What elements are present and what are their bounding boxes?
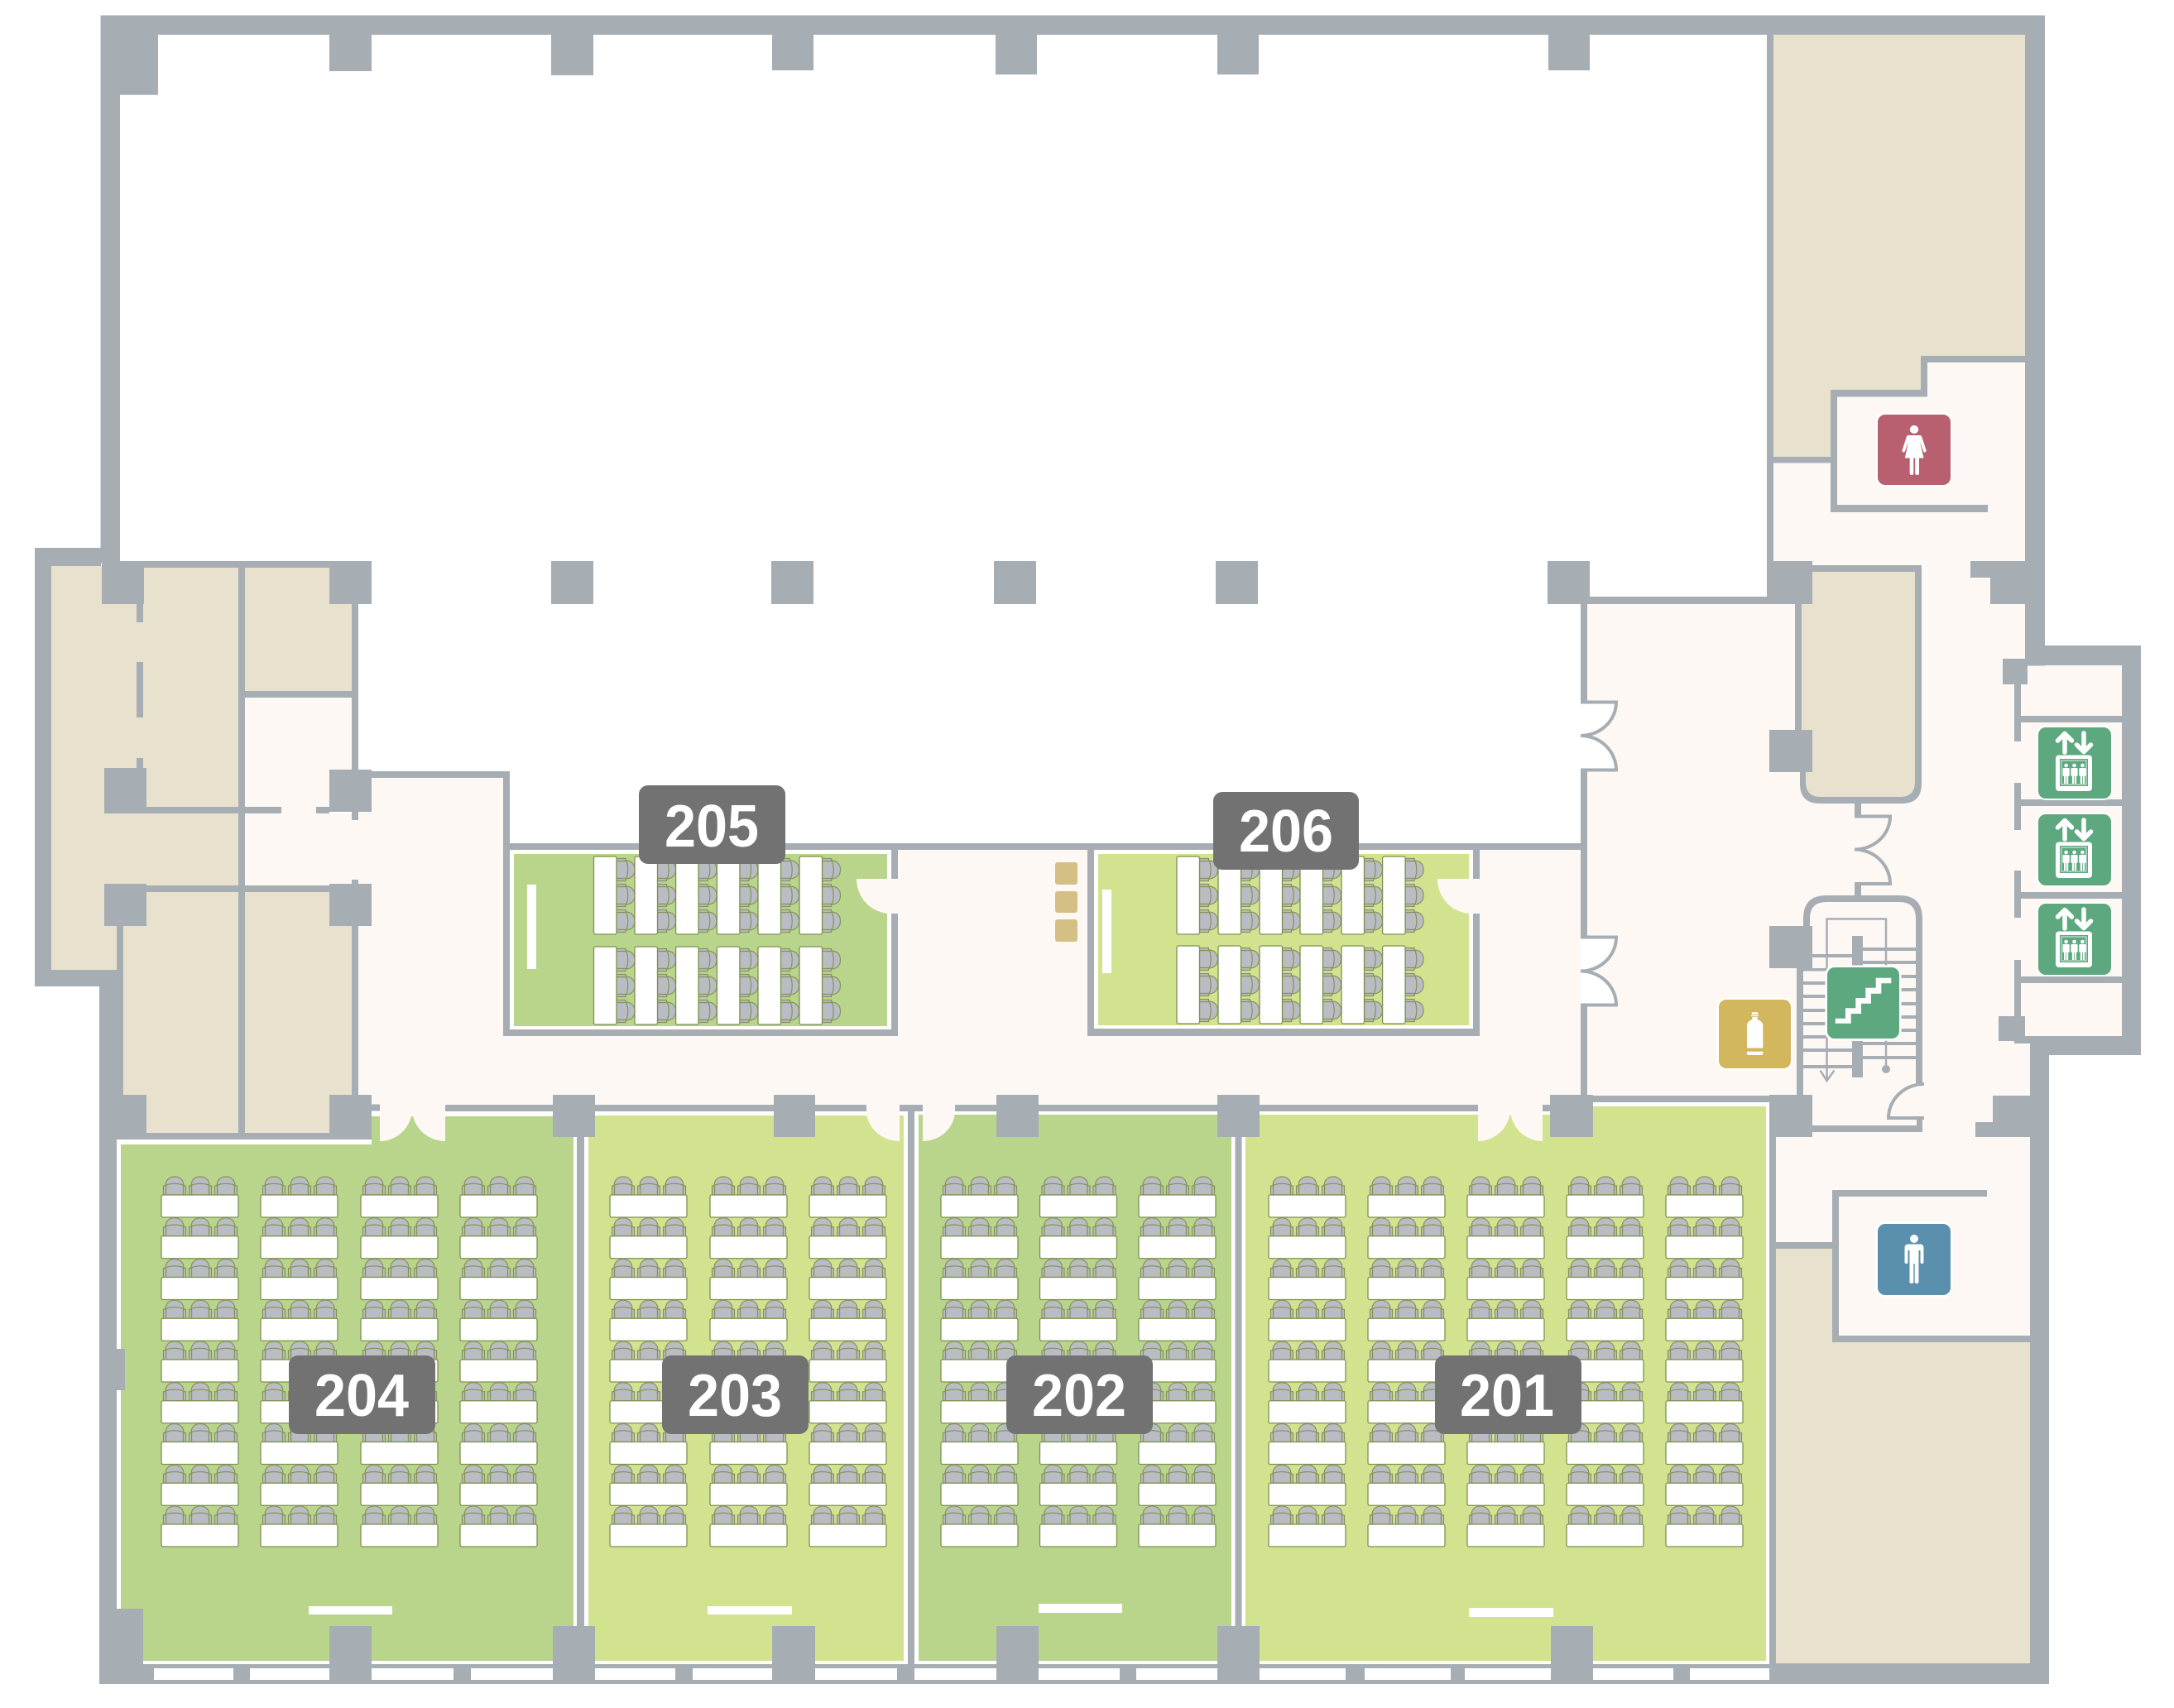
icon: drinking water bottle <box>1716 998 1792 1071</box>
desks <box>161 1177 537 1547</box>
men's room walls <box>1776 1242 1832 1249</box>
label: room 203 <box>662 1355 809 1434</box>
outer walls <box>101 15 2045 35</box>
women's room walls <box>1921 356 2025 362</box>
stair treads <box>1802 936 1916 1077</box>
icon: men's restroom <box>1875 1221 1953 1298</box>
room 203 floor <box>588 1115 904 1661</box>
label: room 204: 204 <box>314 1363 409 1429</box>
room 203 furniture <box>610 1177 886 1614</box>
room floor margin <box>117 1102 1769 1664</box>
stairwell walls <box>1803 895 1922 1084</box>
stair direction line <box>1821 919 1886 1081</box>
door: room 201 <box>1478 1104 1543 1141</box>
label: room 202 <box>1006 1355 1153 1434</box>
storage room with rounded corners <box>1767 561 1922 804</box>
label: room 205: 205 <box>665 794 759 860</box>
whiteboard <box>1039 1604 1122 1613</box>
icon: elevator 3 <box>2037 902 2113 976</box>
room 206 floor <box>1098 854 1469 1025</box>
stairwell door <box>1888 1084 1924 1118</box>
label: room 201: 201 <box>1460 1363 1554 1429</box>
door: east hall upper double door <box>1581 702 1616 770</box>
east hall walls <box>1590 597 1767 604</box>
label: room 204 <box>289 1355 435 1434</box>
door: room 206 <box>1437 879 1480 914</box>
partition walls around rooms 205 and 206 <box>372 771 510 778</box>
door: east hall lower double door <box>1581 937 1616 1005</box>
label: room 205 <box>639 785 785 864</box>
stairwell <box>1769 895 1924 1118</box>
label: room 206 <box>1213 792 1359 870</box>
desks <box>1177 856 1423 1024</box>
room 206 furniture <box>1102 856 1423 1024</box>
label: room 203: 203 <box>688 1363 782 1429</box>
whiteboard <box>1469 1608 1553 1617</box>
desks <box>941 1177 1216 1547</box>
room 201 furniture <box>1269 1177 1743 1617</box>
icon: stairs <box>1826 965 1902 1041</box>
label: room 202: 202 <box>1032 1363 1126 1429</box>
bottom pillars <box>329 1626 372 1684</box>
whiteboard <box>1102 890 1111 973</box>
desks <box>610 1177 886 1547</box>
room 205 floor <box>514 854 887 1026</box>
room 202 furniture <box>941 1177 1216 1613</box>
room 204 furniture <box>161 1177 537 1614</box>
room 204 floor <box>121 1116 573 1661</box>
room 202 floor <box>919 1115 1231 1661</box>
door: room 202 <box>923 1104 955 1141</box>
icon: elevator 1 <box>2037 726 2113 800</box>
desks <box>594 856 841 1024</box>
elevator bay walls <box>2003 659 2028 684</box>
tan lockers <box>1055 862 1077 942</box>
middle pillars <box>102 561 144 604</box>
door: room 205 <box>857 879 898 914</box>
icon: elevator 2 <box>2037 813 2113 887</box>
door: room 203 <box>866 1104 900 1141</box>
whiteboard <box>309 1606 392 1614</box>
room 201 floor <box>1245 1106 1766 1661</box>
icon: women's restroom <box>1875 412 1953 487</box>
label: room 206: 206 <box>1239 799 1333 865</box>
windows along south facade <box>154 1668 1769 1680</box>
desks <box>1269 1177 1743 1547</box>
label: room 201 <box>1435 1355 1581 1434</box>
room 205 furniture <box>527 856 841 1024</box>
top pillars <box>329 35 372 71</box>
whiteboard <box>527 885 536 969</box>
whiteboard <box>708 1606 792 1614</box>
door: room 204 <box>380 1104 445 1141</box>
corridors <box>245 362 2122 1337</box>
south room walls <box>372 1104 380 1111</box>
door: lobby double door <box>1855 804 1890 896</box>
seminar room floors <box>117 854 1769 1664</box>
west wing walls <box>120 561 329 568</box>
